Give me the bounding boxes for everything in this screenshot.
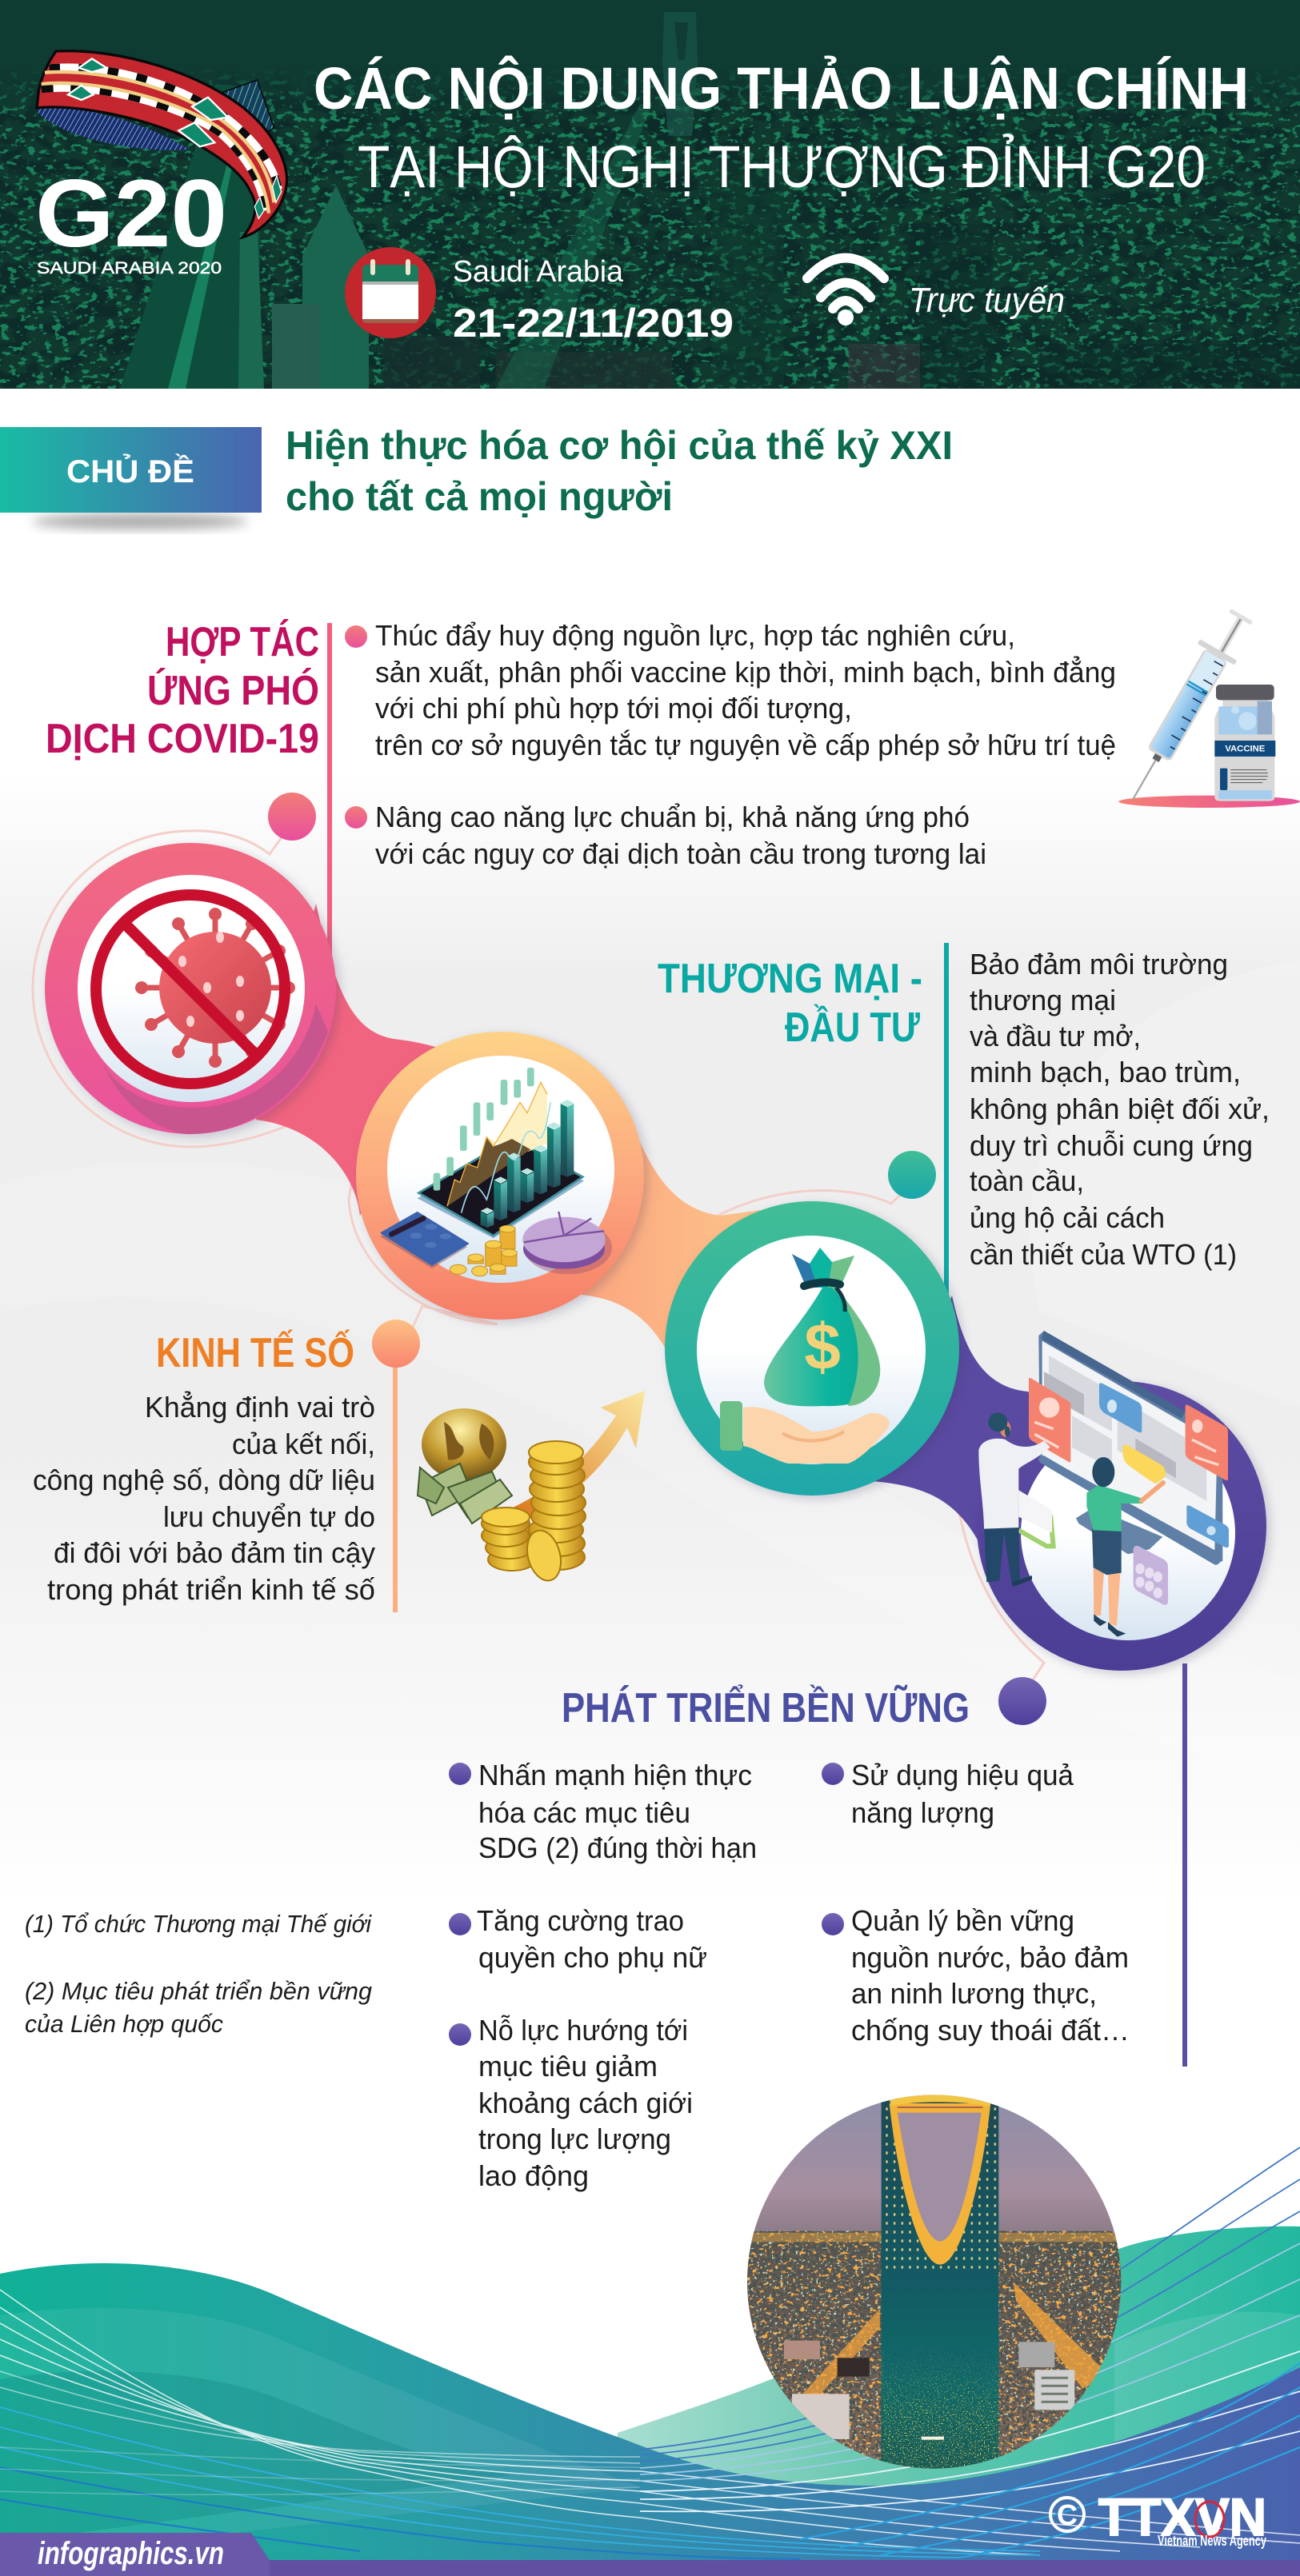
digital economy text: trong phát triển kinh tế số xyxy=(47,1573,375,1606)
heading: covid: HỢP TÁC xyxy=(166,619,319,665)
icon: monitor with people xyxy=(978,1331,1229,1637)
logo: TTXVN: TTXVN xyxy=(1098,2487,1266,2546)
icon: gold globe, coins, arrow xyxy=(418,1391,645,1584)
bullet: SDG targets xyxy=(449,1759,757,1864)
heading: trade xyxy=(658,956,922,1051)
G20 wordmark: G20 xyxy=(35,160,227,267)
panel: theme xyxy=(0,423,953,529)
theme text: cho tất cả mọi người xyxy=(286,474,673,519)
bullet: SDG targets: SDG (2) đúng thời hạn xyxy=(478,1831,757,1864)
trade text: cần thiết của WTO (1) xyxy=(970,1238,1237,1271)
trade text: toàn cầu, xyxy=(970,1164,1084,1197)
bullet: vaccine access: trên cơ sở nguyên tắc tự nguyện về cấp phép sở hữu trí tuệ xyxy=(375,729,1116,761)
thin ring outlines xyxy=(33,831,1044,1687)
theme text: Hiện thực hóa cơ hội của thế kỷ XXI xyxy=(286,423,953,468)
bullet: SDG targets: hóa các mục tiêu xyxy=(478,1796,690,1829)
heading: covid: DỊCH COVID-19 xyxy=(46,716,319,762)
connector: orange to teal xyxy=(568,1112,760,1368)
icon: prohibition sign xyxy=(96,895,285,1084)
bullet: pandemic preparedness: Nâng cao năng lực chuẩn bị, khả năng ứng phó xyxy=(375,801,970,833)
circle: covid xyxy=(45,843,336,1134)
connector: teal to purple xyxy=(872,1296,1064,1588)
connector: pink to orange xyxy=(256,904,438,1216)
icon: vaccine and syringe xyxy=(1114,603,1300,810)
trade text: thương mại xyxy=(970,984,1116,1016)
divider lines xyxy=(327,623,1187,2067)
online label: Trực tuyến xyxy=(909,281,1065,320)
bullet: energy: năng lượng xyxy=(851,1796,994,1829)
trade text: không phân biệt đối xử, xyxy=(970,1092,1270,1125)
logo caption: SAUDI ARABIA 2020 xyxy=(37,259,222,278)
icon: vaccine and syringe: VACCINE xyxy=(1225,745,1266,754)
digital economy text: lưu chuyển tự do xyxy=(163,1500,375,1533)
event location and date: Saudi Arabia xyxy=(453,255,624,289)
dot: sustainable development xyxy=(998,1677,1046,1725)
inner white circle xyxy=(1021,1426,1235,1640)
theme text xyxy=(286,423,953,519)
icon: money bag on hand xyxy=(720,1248,890,1464)
icon: stock chart and tablet xyxy=(380,1068,612,1276)
heading: sustainable development: PHÁT TRIỂN BỀN VỮNG xyxy=(562,1684,970,1731)
bullet: gender gap: trong lực lượng xyxy=(478,2123,671,2155)
bullet: water and food: Quản lý bền vững xyxy=(851,1904,1074,1937)
logo: TTXVN: C xyxy=(1057,2498,1078,2531)
panel: header banner xyxy=(0,0,1300,389)
digital economy text: đi đôi với bảo đảm tin cậy xyxy=(54,1536,375,1569)
bullet: vaccine access: Thúc đẩy huy động nguồn lực, hợp tác nghiên cứu, xyxy=(375,619,1015,652)
circle: digital people and monitor xyxy=(977,1331,1266,1671)
heading: covid xyxy=(46,619,319,762)
bullet: water and food: an ninh lương thực, xyxy=(851,1977,1097,2010)
heading: trade: ĐẦU TƯ xyxy=(785,1004,921,1051)
bullet: gender gap xyxy=(449,2014,693,2192)
trade text: minh bạch, bao trùm, xyxy=(970,1056,1241,1088)
trade text: ủng hộ cải cách xyxy=(970,1201,1165,1234)
footer tab: infographics.vn: infographics.vn xyxy=(38,2536,224,2571)
title xyxy=(314,55,1249,200)
digital economy text: công nghệ số, dòng dữ liệu xyxy=(33,1464,375,1496)
footnotes: (2) Mục tiêu phát triển bền vững xyxy=(25,1977,372,2005)
footer waves xyxy=(0,2147,1300,2560)
section: covid cooperation xyxy=(46,603,1300,870)
bullet: empower women: Tăng cường trao xyxy=(477,1904,684,1937)
theme tag shadow xyxy=(32,513,248,529)
title: CÁC NỘI DUNG THẢO LUẬN CHÍNH xyxy=(314,55,1249,122)
dot: covid xyxy=(268,793,316,841)
footer tab: infographics.vn xyxy=(0,2533,270,2576)
section: digital economy xyxy=(33,1320,645,1606)
bullet: water and food: chống suy thoái đất… xyxy=(851,2014,1130,2047)
bullet: water and food: nguồn nước, bảo đảm xyxy=(851,1941,1129,1974)
bullet: gender gap: Nỗ lực hướng tới xyxy=(478,2014,688,2047)
bullet: empower women: quyền cho phụ nữ xyxy=(478,1941,707,1974)
bullet: energy xyxy=(822,1759,1074,1829)
bullet: pandemic preparedness xyxy=(345,801,986,870)
trade text xyxy=(970,948,1270,1271)
photo: Kingdom Centre Riyadh xyxy=(736,2087,1136,2471)
dot: digital economy xyxy=(372,1320,420,1368)
digital economy text: Khẳng định vai trò xyxy=(145,1390,375,1424)
title: TẠI HỘI NGHỊ THƯỢNG ĐỈNH G20 xyxy=(358,134,1206,200)
theme tag: CHỦ ĐỀ xyxy=(66,453,194,489)
bullet: gender gap: lao động xyxy=(478,2159,589,2192)
bullet: gender gap: khoảng cách giới xyxy=(478,2087,693,2119)
icon: money bag on hand: $ xyxy=(804,1311,841,1384)
bullet: vaccine access: sản xuất, phân phối vaccine kịp thời, minh bạch, bình đẳng xyxy=(375,655,1116,689)
bullet: SDG targets: Nhấn mạnh hiện thực xyxy=(478,1759,752,1791)
icon: virus xyxy=(135,908,295,1068)
section: trade and investment xyxy=(658,948,1270,1271)
bullet: energy: Sử dụng hiệu quả xyxy=(851,1759,1074,1791)
footnotes: (1) Tổ chức Thương mại Thế giới xyxy=(25,1910,372,1938)
heading: trade: THƯƠNG MẠI - xyxy=(658,956,922,1002)
wave lines xyxy=(0,2147,1300,2559)
icon: wifi xyxy=(807,258,884,325)
bullet: water and food xyxy=(822,1904,1130,2047)
event location and date: 21-22/11/2019 xyxy=(453,301,734,345)
section: sustainable development xyxy=(449,1677,1130,2192)
bullet: pandemic preparedness: với các nguy cơ đại dịch toàn cầu trong tương lai xyxy=(375,837,986,870)
footnotes: của Liên hợp quốc xyxy=(25,2010,223,2038)
bullet: vaccine access xyxy=(345,619,1116,761)
bullet: empower women xyxy=(449,1904,707,1974)
bullet: gender gap: mục tiêu giảm xyxy=(478,2050,658,2083)
theme tag xyxy=(0,427,262,513)
logo: G20 Saudi Arabia 2020 xyxy=(35,51,286,278)
icon: calendar xyxy=(345,247,436,338)
icon: sadu ribbon xyxy=(37,51,286,238)
digital economy text xyxy=(33,1390,375,1606)
digital economy text: của kết nối, xyxy=(232,1428,375,1460)
footnotes xyxy=(25,1910,372,2038)
circle: money bag xyxy=(665,1201,959,1496)
trade text: và đầu tư mở, xyxy=(970,1020,1141,1052)
bullet: vaccine access: với chi phí phù hợp tới mọi đối tượng, xyxy=(375,692,852,725)
heading: digital economy: KINH TẾ SỐ xyxy=(156,1329,354,1376)
heading: covid: ỨNG PHÓ xyxy=(147,668,319,714)
circle: trade chart xyxy=(356,1032,644,1320)
dot: trade xyxy=(888,1151,936,1199)
trade text: Bảo đảm môi trường xyxy=(970,948,1228,980)
trade text: duy trì chuỗi cung ứng xyxy=(970,1129,1253,1162)
event location and date xyxy=(453,255,734,345)
footer bar xyxy=(0,2560,1300,2576)
